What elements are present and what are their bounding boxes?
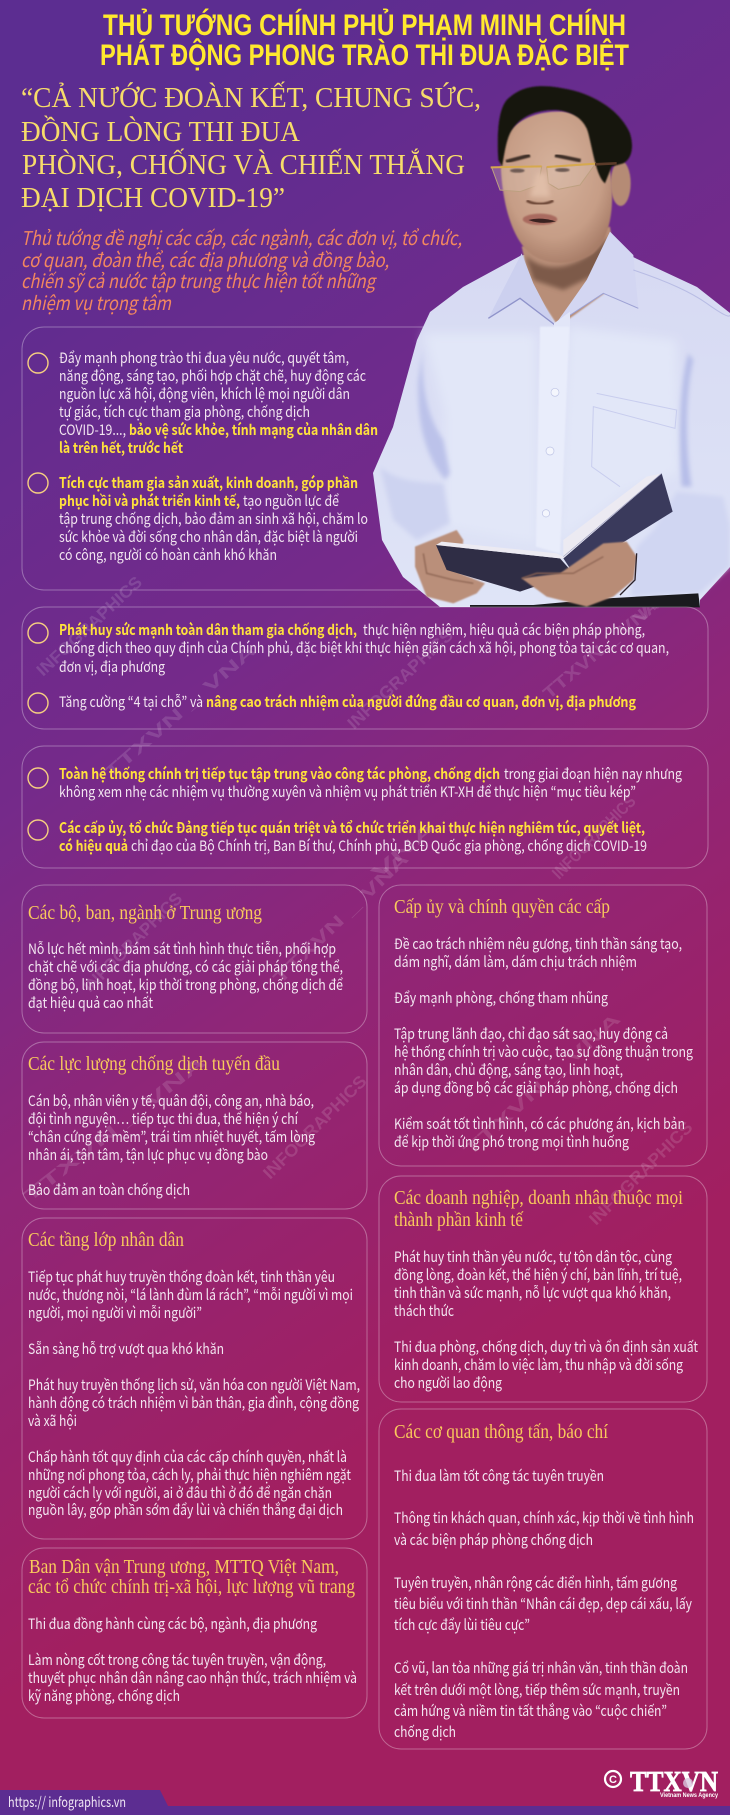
text: party committees: áp dụng đồng bộ các giải pháp phòng, chống dịch: [394, 1077, 678, 1098]
icon: ring bullet 4: [28, 693, 48, 713]
heading: ministries: Các bộ, ban, ngành ở Trung ương: [28, 902, 262, 924]
icon: ring bullet 1: [28, 353, 48, 373]
title: THỦ TƯỚNG CHÍNH PHỦ PHẠM MINH CHÍNH: [103, 8, 626, 42]
text: item 3: Phát huy sức mạnh toàn dân tham gia chống dịch,: [59, 619, 357, 640]
text: item 1: bảo vệ sức khỏe, tính mạng của nhân dân: [129, 419, 378, 440]
text: mass mobilization: [28, 1613, 357, 1706]
photo: Prime Minister holding a book: [373, 86, 730, 607]
panel: people: [22, 1218, 367, 1539]
heading: businesses: Các doanh nghiệp, doanh nhân thuộc mọi: [394, 1187, 683, 1209]
text: businesses: kinh doanh, chăm lo việc làm, thu nhập và đời sống: [394, 1354, 683, 1375]
text: frontline forces: Cán bộ, nhân viên y tế, quân đội, công an, nhà báo,: [28, 1090, 314, 1111]
text: press: tích cực đẩy lùi tiêu cực”: [394, 1614, 530, 1635]
text: people: [28, 1266, 360, 1520]
text: press: và các biện pháp phòng chống dịch: [394, 1529, 593, 1550]
watermarks: INFOGRAPHICS: [79, 889, 186, 996]
heading: people: Các tầng lớp nhân dân: [28, 1229, 184, 1251]
panel: box 1 text: [28, 347, 378, 565]
text: item 2: Tích cực tham gia sản xuất, kinh doanh, góp phần: [59, 472, 358, 493]
text: frontline forces: [28, 1090, 315, 1200]
panel: party committees: [379, 885, 707, 1166]
logo: TTXVN: Vietnam News Agency: [660, 1793, 719, 1799]
text: people: Chấp hành tốt quy định của các cấp chính quyền, nhất là: [28, 1446, 347, 1467]
text: ministries: chặt chẽ với các địa phương, có các giải pháp tổng thể,: [28, 956, 343, 977]
text: item 4: nâng cao trách nhiệm của người đứng đầu cơ quan, đơn vị, địa phương: [206, 691, 636, 712]
text: item 2: sức khỏe và đời sống cho nhân dân, đặc biệt là người: [59, 526, 358, 547]
panel: frontline forces: [22, 1042, 367, 1209]
text: people: hành động có trách nhiệm vì bản thân, gia đình, cộng đồng: [28, 1392, 359, 1413]
text: ministries: đồng bộ, linh hoạt, kịp thời trong phòng, chống dịch để: [28, 974, 343, 995]
text: item 2: phục hồi và phát triển kinh tế,: [59, 490, 240, 511]
icon: ring bullet 5: [28, 768, 48, 788]
watermarks: TTXVN _ VNA: [20, 1052, 210, 1206]
icon: ring bullet 6: [28, 820, 48, 840]
text: businesses: Phát huy tinh thần yêu nước, tự tôn dân tộc, cùng: [394, 1246, 672, 1267]
text: people: người, mọi người vì mỗi người”: [28, 1302, 202, 1323]
watermarks: INFOGRAPHICS: [259, 1072, 370, 1183]
text: businesses: cho người lao động: [394, 1372, 502, 1393]
text: item 6: [59, 817, 647, 856]
quote heading: PHÒNG, CHỐNG VÀ CHIẾN THẮNG: [22, 149, 465, 181]
watermarks: TTXVN _ VNA: [100, 641, 260, 783]
text: ministries: đạt hiệu quả cao nhất: [28, 992, 153, 1013]
icon: ring bullet 3: [28, 623, 48, 643]
heading: frontline forces: Các lực lượng chống dịch tuyến đầu: [28, 1053, 280, 1075]
logo: TTXVN: [605, 1767, 719, 1799]
text: mass mobilization: Làm nòng cốt trong công tác tuyên truyền, vận động,: [28, 1649, 326, 1670]
text: item 1: tự giác, tích cực tham gia phòng, chống dịch: [59, 401, 310, 422]
text: ministries: Nỗ lực hết mình, bám sát tình hình thực tiễn, phối hợp: [28, 938, 336, 959]
text: press: [394, 1465, 694, 1742]
text: item 4: Tăng cường “4 tại chỗ” và: [59, 691, 203, 712]
heading: press: Các cơ quan thông tấn, báo chí: [394, 1421, 608, 1443]
logo: TTXVN: C: [609, 1774, 617, 1786]
intro text: chiến sỹ cả nước tập trung thực hiện tốt những: [21, 267, 377, 294]
text: party committees: dám nghĩ, dám làm, dám chịu trách nhiệm: [394, 951, 637, 972]
heading: businesses: thành phần kinh tế: [394, 1209, 524, 1231]
text: item 1: là trên hết, trước hết: [59, 437, 183, 458]
text: item 2: [59, 472, 368, 565]
quote heading: ĐỒNG LÒNG THI ĐUA: [21, 116, 301, 148]
text: people: và xã hội: [28, 1410, 77, 1431]
shirt: [373, 233, 730, 607]
text: party committees: Tập trung lãnh đạo, chỉ đạo sát sao, huy động cả: [394, 1023, 668, 1044]
text: item 2: tập trung chống dịch, bảo đảm an sinh xã hội, chăm lo: [59, 508, 368, 529]
panel: box 1 outline: [22, 327, 522, 590]
watermarks: VNA: [367, 817, 441, 883]
quote heading: ĐẠI DỊCH COVID-19”: [21, 183, 285, 214]
heading: party committees: Cấp ủy và chính quyền các cấp: [394, 896, 610, 918]
text: item 1: nguồn lực xã hội, động viên, khích lệ mọi người dân: [59, 383, 350, 404]
text: frontline forces: “chân cứng đá mềm”, trái tim nhiệt huyết, tấm lòng: [28, 1126, 315, 1147]
heading: mass mobilization: các tổ chức chính trị-xã hội, lực lượng vũ trang: [28, 1576, 355, 1598]
text: item 3: thực hiện nghiêm, hiệu quả các biện pháp phòng,: [363, 619, 645, 640]
text: frontline forces: nhân ái, tận tâm, tận lực phục vụ đồng bào: [28, 1144, 268, 1165]
panel: businesses: [379, 1176, 707, 1402]
text: item 5: [59, 763, 682, 802]
text: item 6: Các cấp ủy, tổ chức Đảng tiếp tục quán triệt và tổ chức triển khai thực hiện nghiêm túc, quyết liệt,: [59, 817, 645, 838]
text: people: Phát huy truyền thống lịch sử, văn hóa con người Việt Nam,: [28, 1374, 360, 1395]
intro text: nhiệm vụ trọng tâm: [21, 289, 172, 316]
text: press: Tuyên truyền, nhân rộng các điển hình, tấm gương: [394, 1572, 677, 1593]
text: businesses: thách thức: [394, 1300, 454, 1321]
text: people: người cách ly với người, ai ở đâu thì ở đó để ngăn chặn: [28, 1482, 332, 1503]
intro text: Thủ tướng đề nghị các cấp, các ngành, các đơn vị, tổ chức,: [21, 224, 462, 251]
panel: box 2: [22, 607, 708, 729]
text: party committees: Kiểm soát tốt tình hình, có các phương án, kịch bản: [394, 1113, 685, 1134]
title: [100, 8, 629, 72]
text: mass mobilization: thuyết phục nhân dân nâng cao nhận thức, trách nhiệm và: [28, 1667, 357, 1688]
text: item 4: [59, 691, 636, 712]
text: people: Sẵn sàng hỗ trợ vượt qua khó khăn: [28, 1338, 224, 1359]
text: people: Tiếp tục phát huy truyền thống đoàn kết, tinh thần yêu: [28, 1266, 335, 1287]
text: item 2: có công, người có hoàn cảnh khó khăn: [59, 544, 277, 565]
icon: ring bullet 2: [28, 473, 48, 493]
text: item 5: Toàn hệ thống chính trị tiếp tục tập trung vào công tác phòng, chống dịch: [59, 763, 500, 784]
text: party committees: Đẩy mạnh phòng, chống tham nhũng: [394, 987, 608, 1008]
footer band: https:// infographics.vn: [8, 1792, 126, 1812]
watermarks: TTXVN _ VNA: [539, 595, 663, 703]
text: press: cảm hứng và niềm tin tất thắng vào “cuộc chiến”: [394, 1700, 667, 1721]
text: item 6: có hiệu quả: [59, 835, 128, 856]
logo: TTXVN: TTXVN: [630, 1767, 718, 1798]
text: people: nước, thương nòi, “lá lành đùm lá rách”, “mỗi người vì mọi: [28, 1284, 353, 1305]
text: people: những nơi phong tỏa, cách ly, phải thực hiện nghiêm ngặt: [28, 1464, 351, 1485]
text: item 5: không xem nhẹ các nhiệm vụ thường xuyên và nhiệm vụ phát triển KT-XH để thực hiện “mục tiêu kép”: [59, 781, 636, 802]
text: item 2: tạo nguồn lực để: [243, 490, 339, 511]
text: businesses: tinh thần và sức mạnh, nỗ lực vượt qua khó khăn,: [394, 1282, 671, 1303]
watermarks: INFOGRAPHICS: [33, 573, 146, 680]
footer band: [0, 1790, 730, 1815]
text: businesses: [394, 1246, 698, 1393]
watermarks: INFOGRAPHICS: [548, 792, 640, 883]
text: press: chống dịch: [394, 1721, 456, 1742]
text: item 1: năng động, sáng tạo, phối hợp chặt chẽ, huy động các: [59, 365, 366, 386]
watermarks: INFOGRAPHICS: [344, 626, 457, 733]
text: people: nguồn lây, góp phần sớm đẩy lùi và chiến thắng đại dịch: [28, 1499, 343, 1520]
text: item 5: trong giai đoạn hiện nay nhưng: [504, 763, 682, 784]
panel: box 3: [22, 746, 708, 868]
text: item 3: [59, 619, 669, 677]
quote heading: “CẢ NƯỚC ĐOÀN KẾT, CHUNG SỨC,: [21, 82, 481, 114]
watermarks: TTXVN _ VNA: [270, 849, 412, 988]
text: item 1: COVID-19...,: [59, 419, 126, 440]
text: mass mobilization: Thi đua đồng hành cùng các bộ, ngành, địa phương: [28, 1613, 317, 1634]
head and collar: [488, 86, 730, 350]
text: party committees: để kịp thời ứng phó trong mọi tình huống: [394, 1131, 629, 1152]
text: press: kết trên dưới một lòng, tiếp thêm sức mạnh, truyền: [394, 1679, 680, 1700]
text: party committees: Đề cao trách nhiệm nêu gương, tinh thần sáng tạo,: [394, 933, 682, 954]
heading: mass mobilization: Ban Dân vận Trung ương, MTTQ Việt Nam,: [29, 1556, 339, 1578]
torso, book and hands: [380, 327, 730, 607]
watermarks: INFOGRAPHICS: [585, 1118, 696, 1229]
panel: press: [379, 1409, 707, 1749]
text: frontline forces: Bảo đảm an toàn chống dịch: [28, 1179, 190, 1200]
text: item 3: đơn vị, địa phương: [59, 656, 165, 677]
text: frontline forces: đội tình nguyện… tiếp tục thi đua, thể hiện ý chí: [28, 1108, 299, 1129]
panel: ministries: [22, 885, 367, 1033]
text: party committees: [394, 933, 693, 1152]
text: press: Thi đua làm tốt công tác tuyên truyền: [394, 1465, 604, 1486]
quote heading: [21, 82, 481, 214]
text: party committees: nhân dân, chủ động, sáng tạo, linh hoạt,: [394, 1059, 623, 1080]
text: item 1: Đẩy mạnh phong trào thi đua yêu nước, quyết tâm,: [59, 347, 349, 368]
text: item 6: chỉ đạo của Bộ Chính trị, Ban Bí thư, Chính phủ, BCĐ Quốc gia phòng, chống dịch COVID-19: [131, 835, 647, 856]
text: businesses: đồng lòng, đoàn kết, thể hiện ý chí, bản lĩnh, trí tuệ,: [394, 1264, 682, 1285]
watermarks: TTXVN _ VNA: [460, 1009, 624, 1160]
panel: mass mobilization: [22, 1548, 367, 1718]
intro text: cơ quan, đoàn thể, các địa phương và đồng bào,: [21, 246, 389, 273]
text: item 1: [59, 347, 378, 458]
heading: mass mobilization: [28, 1556, 355, 1598]
text: mass mobilization: kỹ năng phòng, chống dịch: [28, 1685, 180, 1706]
watermarks: VNA: [629, 572, 685, 628]
watermarks: [20, 572, 696, 1229]
heading: businesses: [394, 1187, 683, 1231]
intro text: [21, 224, 462, 316]
text: ministries: [28, 938, 343, 1013]
